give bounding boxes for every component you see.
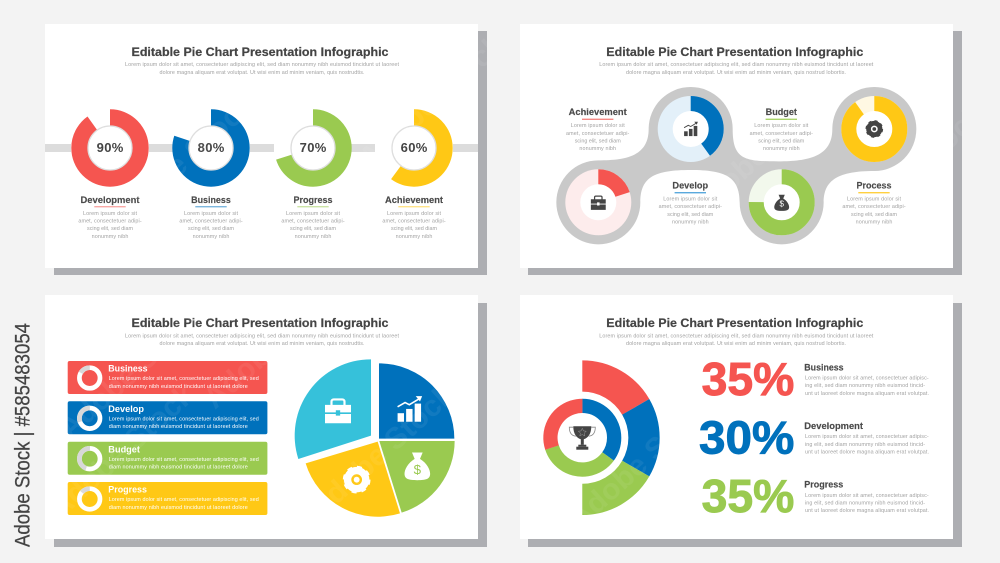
label: Business: Lorem ipsum dolor sit [184, 211, 238, 217]
intro text: dolore magna aliquam erat volutpat. Ut wisi enim ad minim veniam, quis nostrud lobortis. [626, 70, 846, 76]
stat: 30% Development [699, 412, 929, 464]
stat: 30% Development: 30% [699, 412, 794, 464]
panel: ring progress slide [45, 24, 487, 275]
label: Develop: nonummy nibh [672, 220, 709, 226]
card: Develop [68, 401, 267, 434]
intro text [599, 62, 874, 76]
label: Progress: nonummy nibh [295, 234, 331, 240]
donut: 60% [384, 118, 444, 178]
diagonal stock watermark: Adobe Stock [833, 98, 991, 245]
pie: 20% red with briefcase [565, 169, 631, 235]
intro text [125, 334, 400, 347]
diagonal stock watermark: Adobe Stock [43, 378, 201, 525]
panel: percentages slide [498, 295, 962, 547]
label: Budget [750, 107, 813, 152]
slice: green [379, 441, 455, 513]
label: Budget: amet, consectetuer adipi- [750, 131, 813, 137]
intro text: dolore magna aliquam erat volutpat. Ut wisi enim ad minim veniam, quis nostrud lobortis. [626, 341, 846, 347]
label: Achievement: Lorem ipsum dolor sit [571, 123, 625, 129]
pie: 75% green with money bag [749, 169, 815, 235]
stat: 35% Business: Business [804, 362, 844, 372]
label: Business: scing elit, sed diam [188, 226, 234, 232]
diagonal stock watermark: Adobe Stock [103, 88, 261, 235]
stat: 35% Progress: Progress [804, 480, 843, 490]
label: Develop: Develop [672, 180, 709, 190]
donut: 70% [283, 118, 343, 178]
stat: 30% Development: Lorem ipsum dolor sit amet, consectetuer adipisc- [805, 434, 929, 440]
heading: Editable Pie Chart Presentation Infographic [606, 316, 864, 330]
slice: yellow [306, 442, 400, 517]
label: Process: nonummy nibh [856, 220, 892, 226]
label: Develop: scing elit, sed diam [667, 212, 714, 218]
stock id label: Adobe Stock | #585483054 [12, 323, 34, 547]
donut: 90% [80, 118, 140, 178]
pie: 40% blue with chart [658, 96, 724, 162]
label: Achievement: amet, consectetuer adipi- [566, 131, 630, 137]
label: Progress: Progress [294, 195, 332, 205]
card: Progress: Lorem ipsum dolor sit amet, consectetuer adipiscing elit, sed [109, 497, 259, 503]
card: Budget: Lorem ipsum dolor sit amet, consectetuer adipiscing elit, sed [109, 457, 259, 463]
label: Development: nonummy nibh [92, 234, 128, 240]
half ring chart [498, 353, 667, 522]
icon: briefcase [325, 399, 351, 423]
icon: money bag: $ [414, 462, 422, 477]
stat: 35% Progress: unt ut laoreet dolore magna aliquam erat volutpat. [805, 508, 929, 514]
label: Development [78, 195, 142, 240]
slice: cyan [295, 359, 371, 459]
label: Achievement [382, 195, 446, 240]
label: Budget: Budget [766, 107, 797, 117]
intro text: Lorem ipsum dolor sit amet, consectetuer adipiscing elit, sed diam nonummy nibh euismod tincidunt ut laoreet [599, 62, 874, 68]
label: Achievement: scing elit, sed diam [391, 226, 438, 232]
label: Development: scing elit, sed diam [87, 226, 134, 232]
donut: 90%: 90% [97, 140, 124, 155]
label: Develop: Lorem ipsum dolor sit [663, 197, 718, 203]
diagonal stock watermark: Adobe Stock [563, 388, 721, 535]
label: Process: Lorem ipsum dolor sit [847, 197, 902, 203]
inner donut [538, 393, 627, 482]
stat: 35% Progress: Lorem ipsum dolor sit amet, consectetuer adipisc- [805, 493, 929, 499]
diagonal stock watermark: Adobe Stock [303, 378, 461, 525]
label: Develop: amet, consectetuer adipi- [659, 204, 722, 210]
label: Progress: scing elit, sed diam [290, 226, 336, 232]
stat: 35% Business [702, 353, 929, 405]
intro text: dolore magna aliquam erat volutpat. Ut wisi enim ad minim veniam, quis nostrudtis. [160, 70, 364, 76]
intro text [125, 62, 400, 76]
label: Process [842, 180, 906, 226]
panel: wave pie slide [520, 24, 962, 275]
heading: Editable Pie Chart Presentation Infographic [606, 45, 864, 59]
diagonal stock watermark: Adobe Stock [198, 268, 356, 415]
label: Achievement: nonummy nibh [396, 234, 432, 240]
icon: trophy [569, 426, 595, 450]
card: Progress: diam nonummy nibh euismod tincidunt ut laoreet dolore [109, 505, 248, 511]
stat: 35% Business: unt ut laoreet dolore magna aliquam erat volutpat. [805, 391, 929, 397]
slice: blue [379, 363, 454, 439]
icon: money bag [405, 452, 430, 480]
label: Achievement: nonummy nibh [579, 146, 616, 152]
label: Progress: amet, consectetuer adipi- [281, 219, 345, 225]
label: Achievement: Achievement [385, 195, 443, 205]
card: Budget [68, 442, 267, 475]
label: Business: Business [191, 195, 231, 205]
stat: 30% Development: Development [804, 421, 863, 431]
panel: cards and pie slide [45, 295, 487, 547]
pie: 90% yellow with gear [841, 96, 907, 162]
label: Develop [659, 180, 722, 226]
icon: growth chart [398, 396, 422, 422]
label: Achievement: scing elit, sed diam [575, 139, 621, 145]
card: Business [68, 361, 267, 394]
label: Process: Process [856, 180, 892, 190]
icon: gear [345, 468, 369, 492]
card: Develop: Develop [108, 404, 145, 414]
intro text: Lorem ipsum dolor sit amet, consectetuer adipiscing elit, sed diam nonummy nibh euismod tincidunt ut laoreet [599, 334, 874, 340]
donut: 70%: 70% [300, 140, 327, 155]
heading: Editable Pie Chart Presentation Infographic [132, 45, 389, 59]
label: Achievement: amet, consectetuer adipi- [382, 219, 446, 225]
stat: 35% Business: ing elit, sed diam nonummy nibh euismod tincid- [805, 383, 925, 389]
stat: 35% Progress [702, 470, 929, 522]
card: Develop: diam nonummy nibh euismod tincidunt ut laoreet dolore [109, 424, 248, 430]
card: Progress [68, 482, 267, 515]
label: Business [179, 195, 243, 240]
label: Development: Lorem ipsum dolor sit [83, 211, 138, 217]
intro text: dolore magna aliquam erat volutpat. Ut wisi enim ad minim veniam, quis nostrudtis. [160, 341, 364, 347]
stat: 35% Progress: 35% [702, 470, 794, 522]
pie chart [295, 359, 455, 517]
label: Achievement: Lorem ipsum dolor sit [387, 211, 442, 217]
stat: 35% Progress: ing elit, sed diam nonummy nibh euismod tincid- [805, 501, 925, 507]
card: Business: Business [108, 364, 148, 374]
card: Budget: diam nonummy nibh euismod tincidunt ut laoreet dolore [109, 465, 248, 471]
card: Develop: Lorem ipsum dolor sit amet, consectetuer adipiscing elit, sed [109, 416, 259, 422]
card: Business: diam nonummy nibh euismod tincidunt ut laoreet dolore [109, 384, 248, 390]
label: Progress: Lorem ipsum dolor sit [286, 211, 340, 217]
label: Process: amet, consectetuer adipi- [842, 204, 906, 210]
label: Achievement [566, 107, 630, 152]
stat: 35% Business: Lorem ipsum dolor sit amet, consectetuer adipisc- [805, 376, 929, 382]
label: Budget: scing elit, sed diam [758, 139, 805, 145]
label: Development: Development [80, 195, 140, 205]
pie: 75% green with money bag: $ [779, 200, 784, 208]
donut: 80%: 80% [198, 140, 225, 155]
label: Achievement: Achievement [569, 107, 627, 117]
card: Business: Lorem ipsum dolor sit amet, consectetuer adipiscing elit, sed [109, 376, 259, 382]
donut: 80% [181, 118, 241, 178]
label: Budget: Lorem ipsum dolor sit [754, 123, 809, 129]
diagonal stock watermark: Adobe Stock [353, 28, 511, 175]
intro text: Lorem ipsum dolor sit amet, consectetuer adipiscing elit, sed diam nonummy nibh euismod tincidunt ut laoreet [125, 334, 400, 340]
diagonal stock watermark: Adobe Stock [53, 298, 211, 445]
label: Business: nonummy nibh [193, 234, 229, 240]
stat: 30% Development: unt ut laoreet dolore magna aliquam erat volutpat. [805, 450, 929, 456]
stat: 30% Development: ing elit, sed diam nonummy nibh euismod tincid- [805, 442, 925, 448]
stat: 35% Business: 35% [702, 353, 794, 405]
donut: 60%: 60% [401, 140, 428, 155]
label: Process: scing elit, sed diam [851, 212, 898, 218]
card: Progress: Progress [108, 485, 147, 495]
label: Business: amet, consectetuer adipi- [179, 219, 243, 225]
heading: Editable Pie Chart Presentation Infographic [132, 316, 389, 330]
label: Progress [281, 195, 345, 240]
intro text [599, 334, 874, 347]
wave connector [556, 87, 916, 244]
intro text: Lorem ipsum dolor sit amet, consectetuer adipiscing elit, sed diam nonummy nibh euismod tincidunt ut laoreet [125, 62, 400, 68]
diagonal stock watermark: Adobe Stock [683, 78, 841, 225]
label: Development: amet, consectetuer adipi- [78, 219, 142, 225]
label: Budget: nonummy nibh [763, 146, 800, 152]
card: Budget: Budget [108, 444, 140, 454]
